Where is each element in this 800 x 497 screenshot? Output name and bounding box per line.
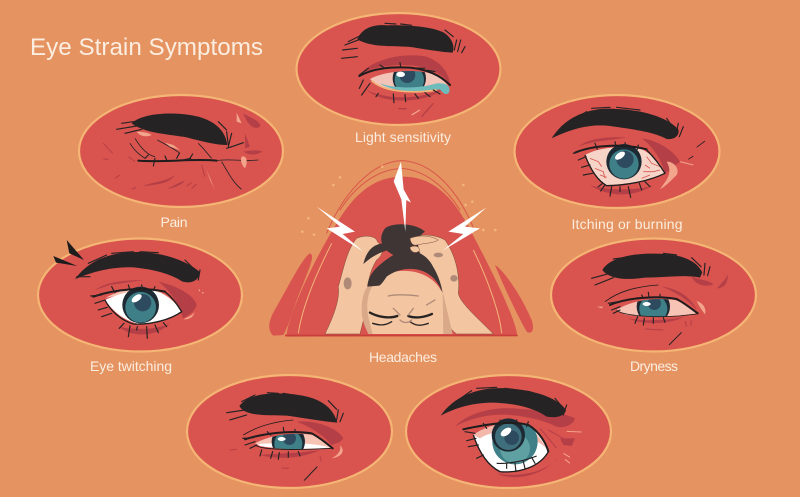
eye illustration: bottom left: [227, 393, 343, 481]
panel: eye twitching: [38, 238, 242, 352]
label: dryness: Dryness: [630, 358, 678, 374]
ellipse: eye twitching: [38, 238, 242, 352]
forehead wrinkles: [388, 295, 435, 322]
label: itching or burning: Itching or burning: [572, 216, 682, 232]
panel: dryness: [551, 238, 756, 352]
icon: twitch marks: [53, 240, 84, 266]
left swoosh: [269, 253, 312, 336]
title: Eye Strain Symptoms: [30, 34, 263, 61]
face: [362, 285, 453, 334]
eye illustration: dryness: [592, 253, 728, 345]
panel: light sensitivity: [296, 13, 500, 125]
label: eye twitching: Eye twitching: [90, 358, 172, 374]
hair strands and fingers: [363, 243, 435, 273]
panel: bottom left eye: [187, 375, 392, 488]
panel: bottom right eye: [406, 375, 611, 488]
red head silhouette: [287, 177, 517, 337]
panel: itching or burning: [514, 95, 720, 208]
ellipse: pain: [79, 95, 283, 207]
closed eyes and brows: [370, 313, 432, 325]
base line: [285, 335, 518, 336]
lightning bolt: right: [443, 207, 487, 251]
lightning bolt: top: [394, 162, 411, 232]
hand shadows: [344, 253, 458, 289]
panel: headaches illustration: [269, 161, 533, 337]
hair: [367, 224, 443, 293]
panel: pain: [79, 95, 283, 207]
ellipse: bottom right: [406, 375, 611, 488]
eye illustration: pain: [103, 113, 263, 190]
ellipse: light sensitivity: [296, 13, 500, 125]
label: pain: Pain: [160, 214, 188, 230]
eye illustration: eye twitching: [75, 252, 204, 338]
eye illustration: itching or burning: [552, 107, 705, 197]
right hand and arm: [410, 235, 493, 334]
lightning bolt: left: [317, 207, 363, 252]
label: headaches: Headaches: [369, 349, 437, 365]
label: light sensitivity: Light sensitivity: [355, 129, 451, 145]
inner highlights: [298, 243, 502, 333]
left hand and arm: [325, 236, 382, 334]
eye illustration: bottom right: [441, 387, 582, 477]
motion arcs: [327, 161, 475, 233]
ellipse: bottom left: [187, 375, 392, 488]
sparks: [301, 165, 497, 236]
ellipse: dryness: [551, 238, 756, 352]
eye illustration: light sensitivity: [342, 23, 465, 117]
ellipse: itching or burning: [514, 95, 720, 208]
right swoosh: [495, 265, 533, 333]
